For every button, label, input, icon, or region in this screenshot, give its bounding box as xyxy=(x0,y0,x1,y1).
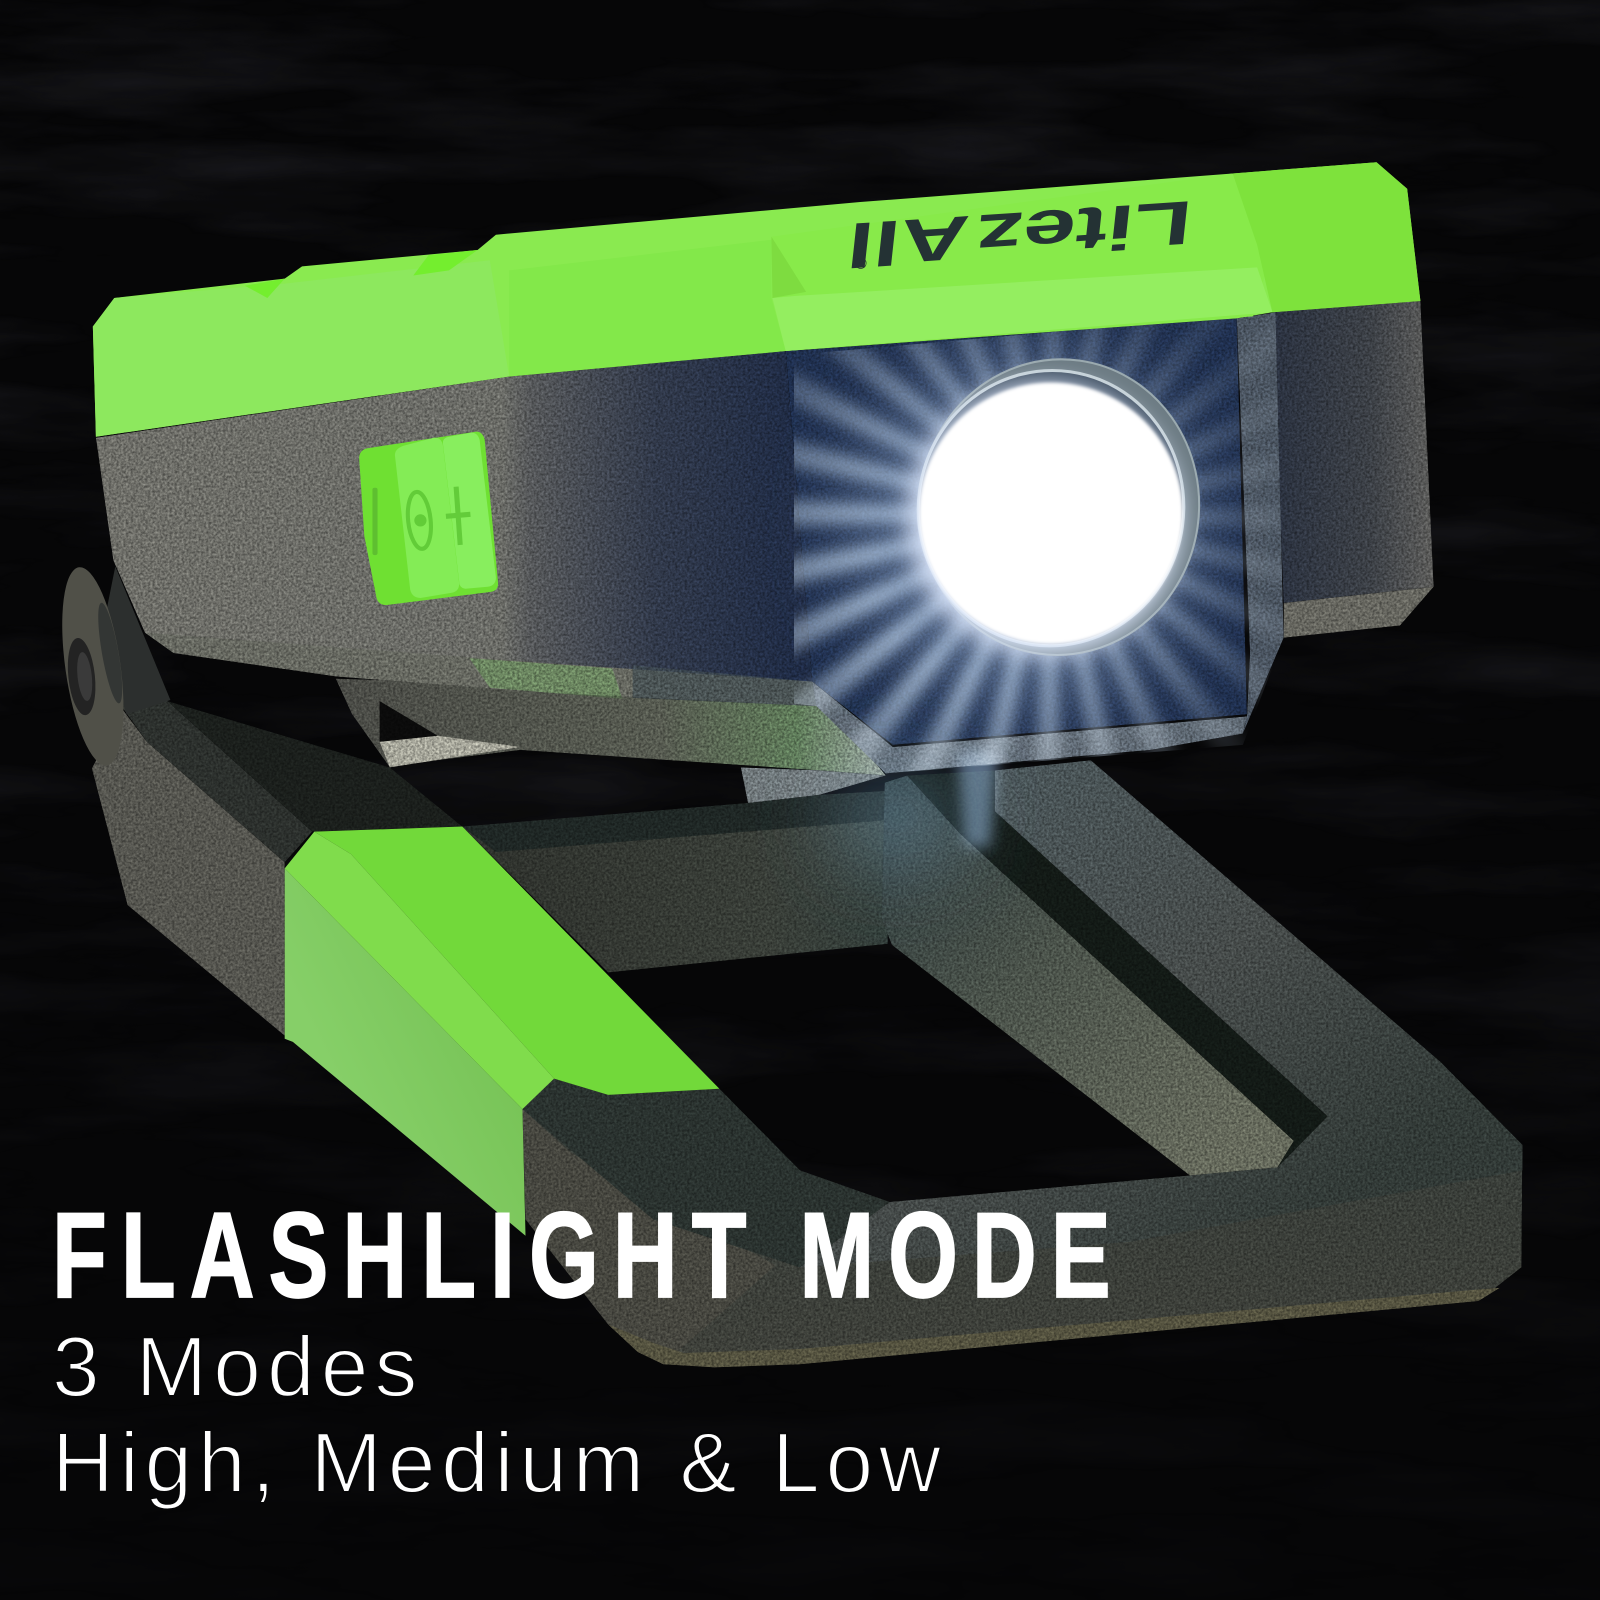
right key xyxy=(443,433,496,589)
green band notches xyxy=(245,250,478,298)
body: underside xyxy=(336,679,886,803)
logo: LitezAll: ® xyxy=(854,253,867,272)
lens ring xyxy=(900,341,1218,673)
green band middle section xyxy=(509,240,786,377)
subtitle line 2: High, Medium & Low xyxy=(52,1415,942,1511)
frame rim highlight xyxy=(608,1288,1500,1367)
middle key xyxy=(395,438,459,598)
light spill below lens xyxy=(827,750,998,867)
light rays around lens xyxy=(837,301,1265,730)
subtitle line 1: 3 Modes xyxy=(52,1319,417,1415)
frame top surface left xyxy=(522,1079,890,1267)
green raised face xyxy=(771,173,1265,351)
frame lower face xyxy=(522,1061,1522,1367)
logo: LitezAll xyxy=(844,187,1195,279)
subtitle text xyxy=(52,1319,942,1511)
body: right side panel xyxy=(1272,301,1434,638)
background: dark feather texture xyxy=(0,0,1600,1094)
body: top green band xyxy=(93,162,1420,437)
stand: pivot screw xyxy=(52,563,170,769)
product: folding work light xyxy=(52,162,1522,1367)
stand: right arm and front frame xyxy=(522,760,1522,1367)
body: grey side panel xyxy=(96,351,816,706)
buttons: mode control xyxy=(360,433,497,604)
arm dark groove xyxy=(907,770,1328,1167)
body: lens face xyxy=(786,312,1284,773)
green right block xyxy=(1233,162,1420,312)
stand: green grip xyxy=(285,827,719,1236)
title: FLASHLIGHT MODE xyxy=(52,1187,1111,1323)
arm inner wall xyxy=(882,776,1294,1176)
button glyph: light xyxy=(405,491,434,550)
lens glow xyxy=(908,382,1183,655)
stand: left arm xyxy=(92,640,462,1036)
arm and frame top surface xyxy=(800,760,1522,1267)
green band left shade xyxy=(93,260,509,437)
logo: LitezAll: Litez All xyxy=(844,187,1195,279)
button glyph: minus xyxy=(372,488,378,555)
frame side shade xyxy=(522,1109,776,1364)
button glyph: plus xyxy=(446,487,470,545)
stand: rear crossbar xyxy=(462,791,888,972)
